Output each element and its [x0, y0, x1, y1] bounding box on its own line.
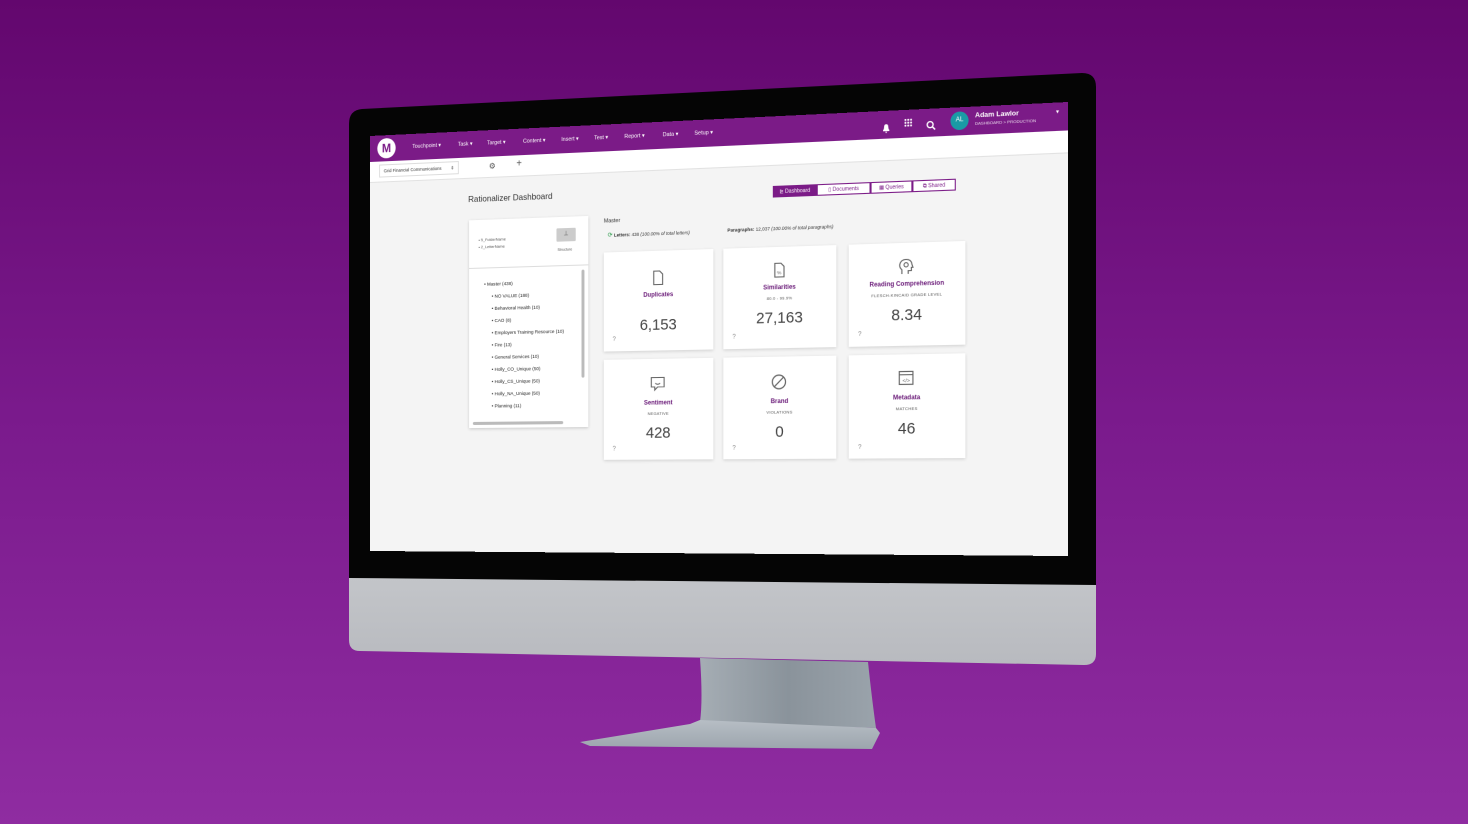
tree list: • CAO (8): [492, 319, 511, 324]
tree list: • Holly_CS_Unique (50): [492, 379, 540, 385]
stats line: [608, 224, 834, 239]
card: sentiment: [604, 358, 713, 460]
nav menu: Target ▾: [487, 140, 506, 147]
folder names: • 5_FolderName: [479, 236, 506, 242]
card: metadata: Metadata: [893, 395, 920, 402]
card: brand: 0: [775, 423, 784, 441]
folder names: • 2_LetterName: [479, 243, 505, 249]
card: duplicates: [604, 249, 713, 352]
card: metadata: ?: [858, 445, 862, 451]
card: sentiment: Sentiment: [644, 400, 673, 407]
card: similarities: 80.0 - 99.9%: [767, 295, 792, 301]
icon: plus: +: [516, 158, 522, 170]
nav menu: Test ▾: [594, 135, 608, 142]
header bar: [370, 102, 1068, 162]
card: sentiment: NEGATIVE: [648, 411, 669, 416]
card: metadata: MATCHES: [896, 406, 918, 411]
stats line: ⟳ Letters: 438 (100.00% of total letters): [608, 230, 690, 239]
nav menu: [412, 130, 714, 150]
nav menu: Content ▾: [523, 138, 546, 145]
card: reading comprehension: Reading Comprehension: [869, 280, 944, 289]
icon: head gear: [898, 258, 914, 274]
tree list: • NO VALUE (188): [492, 294, 529, 300]
user name: DASHBOARD > PRODUCTION: [975, 118, 1036, 126]
nav menu: Insert ▾: [561, 136, 579, 143]
logo: M: [382, 141, 391, 155]
card: brand: ?: [732, 446, 736, 452]
structure button: [556, 228, 576, 242]
avatar: [950, 111, 969, 130]
icon: percent doc: %: [777, 270, 781, 276]
card: brand: VIOLATIONS: [766, 409, 793, 415]
card: similarities: [723, 245, 836, 349]
icon: no symbol: [771, 374, 786, 390]
card: sentiment: ?: [613, 446, 616, 453]
tabs: ⊵ Dashboard: [779, 188, 810, 195]
tree list: • Behavioral Health (10): [492, 306, 540, 312]
tabs: ⧉ Shared: [923, 182, 945, 190]
header bar: ▾: [1056, 109, 1059, 116]
nav menu: Setup ▾: [694, 130, 713, 137]
card: duplicates: 6,153: [640, 316, 677, 334]
bezel: [349, 73, 1096, 586]
card: similarities: ?: [732, 334, 736, 341]
icon: smiley bubble: [650, 376, 665, 392]
stats line: Paragraphs: 12,037 (100.00% of total paragraphs): [727, 224, 833, 233]
card: brand: Brand: [771, 399, 788, 405]
card: duplicates: Duplicates: [643, 292, 673, 299]
dropdown: ⇕: [451, 165, 454, 170]
icon: document: [653, 270, 664, 286]
card: metadata: 46: [898, 420, 915, 438]
card: brand: [723, 356, 836, 459]
structure button: ⊥: [564, 231, 569, 237]
icon: search: [926, 120, 936, 130]
card: similarities: Similarities: [763, 284, 796, 292]
card: reading comprehension: FLESCH-KINCAID GRADE LEVEL: [871, 291, 942, 298]
nav menu: Touchpoint ▾: [412, 143, 441, 150]
nav menu: Data ▾: [663, 131, 678, 138]
card: reading comprehension: ?: [858, 332, 862, 338]
user name: [975, 110, 1036, 126]
panel: structure tree: [469, 216, 588, 428]
tree list: • Holly_NA_Unique (50): [492, 392, 540, 397]
screen: [370, 102, 1068, 556]
toolbar: [370, 130, 1068, 183]
tree list: • General Services (10): [492, 355, 539, 361]
nav menu: Report ▾: [624, 133, 645, 140]
icon: code window: </>: [902, 378, 910, 383]
label: master: Master: [604, 218, 620, 225]
folder names: Structure: [557, 247, 572, 252]
card: metadata: [849, 353, 965, 459]
logo: [377, 138, 396, 159]
tree list: • Fire (13): [492, 343, 512, 349]
tree list: [484, 281, 564, 410]
card: reading comprehension: [849, 241, 965, 347]
tree list: • Planning (11): [492, 404, 521, 410]
icon: gear: ⚙: [489, 161, 496, 171]
nav menu: Task ▾: [458, 141, 473, 148]
icon: bell: [883, 124, 890, 134]
chin: [349, 578, 1096, 665]
icon: percent doc: [774, 262, 785, 278]
avatar: AL: [956, 117, 963, 124]
tree list: • Holly_CO_Unique (50): [492, 367, 540, 373]
card: reading comprehension: 8.34: [891, 306, 922, 325]
user name: Adam Lawlor: [975, 110, 1019, 120]
tree list: • Employers Training Resource (10): [492, 330, 564, 336]
folder names: [469, 216, 588, 269]
icon: code window: [898, 370, 914, 386]
card: sentiment: 428: [646, 424, 671, 442]
tabs: ▯ Documents: [828, 186, 859, 193]
card: similarities: 27,163: [756, 309, 803, 328]
tree list: • Master (438): [484, 282, 513, 288]
tabs: [772, 178, 956, 198]
tabs: ▦ Queries: [879, 184, 904, 191]
icon: app grid: [904, 118, 912, 127]
card: duplicates: ?: [613, 337, 616, 343]
title: Rationalizer Dashboard: [468, 191, 552, 204]
stand: [580, 658, 880, 749]
dropdown: Grid Financial Communications: [384, 166, 442, 173]
dropdown: [379, 161, 459, 178]
